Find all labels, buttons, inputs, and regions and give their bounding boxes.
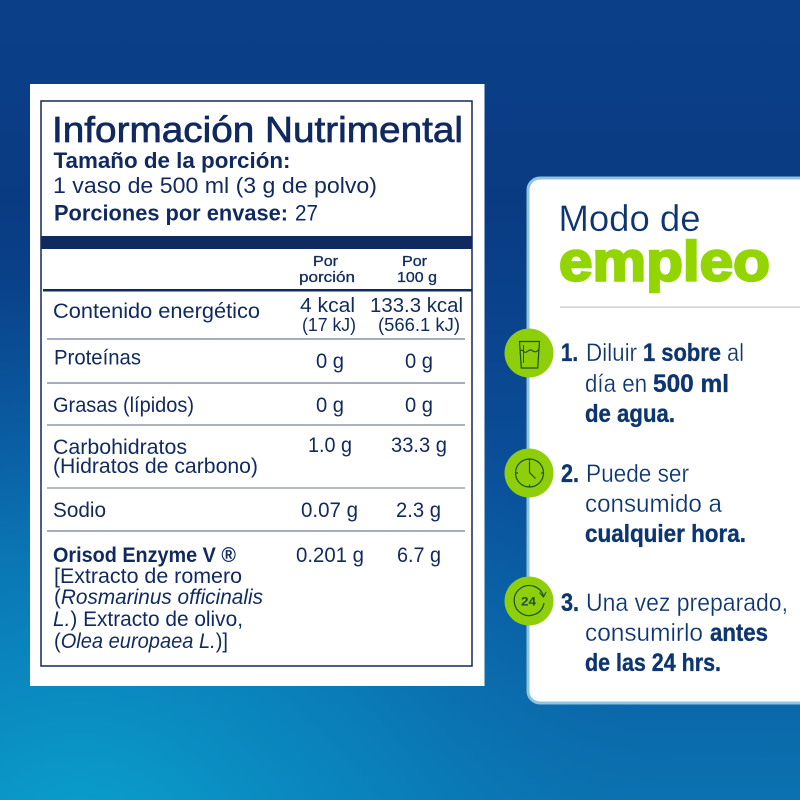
table column headers: Por (402, 253, 427, 270)
row: energy (53, 294, 463, 335)
row: energy: (566.1 kJ) (378, 314, 460, 335)
table column headers: Por (313, 253, 338, 270)
table column headers: porción (299, 269, 355, 286)
step 2 (561, 460, 746, 548)
row: energy: 4 kcal (300, 294, 355, 317)
heading: Modo de: Modo de (558, 198, 700, 239)
row: Orisod Enzyme: L.) Extracto de olivo, (53, 608, 243, 631)
row: fat: Grasas (lípidos) (53, 394, 194, 417)
serving size (53, 148, 377, 198)
row: carbohydrates: 1.0 g (308, 434, 352, 457)
step 3 (561, 589, 788, 677)
servings per container: 27 (295, 200, 318, 226)
heading: empleo: empleo (559, 230, 770, 292)
row: protein: 0 g (405, 350, 433, 373)
row: protein (54, 346, 433, 373)
row: sodium: 2.3 g (396, 499, 441, 522)
icon: water glass (504, 328, 554, 378)
step 1: 1. (561, 339, 578, 367)
step 1: 500 ml (653, 370, 729, 398)
row: protein: Proteínas (54, 346, 141, 370)
step 3: de las 24 hrs. (585, 649, 721, 677)
panel: directions for use (504, 178, 800, 703)
serving size: 1 vaso de 500 ml (3 g de polvo) (53, 173, 377, 198)
step 1: al (727, 339, 744, 367)
step 3: Una vez preparado, (586, 589, 788, 617)
step 1: Diluir (586, 339, 637, 367)
header band (41, 236, 472, 249)
icon: 24 hours (504, 576, 554, 626)
step 3: 3. (561, 589, 579, 617)
row: fat (53, 394, 433, 417)
row: Orisod Enzyme: (Rosmarinus officinalis (54, 586, 263, 609)
step 2: 2. (561, 460, 579, 488)
row: energy: 133.3 kcal (370, 294, 463, 317)
table rules (43, 289, 472, 532)
row: carbohydrates: (Hidratos de carbono) (53, 455, 258, 478)
row: protein: 0 g (316, 350, 344, 373)
row: sodium: 0.07 g (301, 499, 358, 522)
step 3: consumirlo (585, 619, 703, 647)
step 2: Puede ser (586, 460, 689, 488)
row: fat: 0 g (405, 394, 433, 417)
row: sodium (53, 499, 441, 522)
row: carbohydrates (53, 434, 447, 478)
divider (560, 306, 800, 308)
row: Orisod Enzyme: 6.7 g (397, 544, 441, 567)
step 2: cualquier hora. (585, 520, 746, 548)
icon: 24 hours: 24 (521, 594, 536, 608)
row: carbohydrates: 33.3 g (391, 434, 447, 457)
step 1: de agua. (585, 400, 675, 428)
serving size: Tamaño de la porción: (54, 148, 290, 173)
step 2: consumido a (585, 490, 722, 518)
step 1: día en (585, 370, 647, 398)
step 3: antes (710, 619, 768, 647)
step 1: 1 sobre (643, 339, 721, 367)
row: Orisod Enzyme: 0.201 g (296, 544, 364, 567)
panel: nutrition facts (30, 84, 484, 686)
row: energy: Contenido energético (53, 300, 260, 323)
row: carbohydrates: Carbohidratos (53, 436, 187, 459)
row: energy: (17 kJ) (302, 314, 356, 335)
table column headers: 100 g (397, 269, 437, 286)
row: Orisod Enzyme (53, 544, 441, 653)
icon: clock (504, 448, 554, 498)
row: fat: 0 g (316, 394, 344, 417)
step 1 (561, 339, 744, 428)
row: Orisod Enzyme: [Extracto de romero (54, 565, 242, 588)
row: sodium: Sodio (53, 499, 106, 522)
table column headers (299, 253, 437, 286)
servings per container: Porciones por envase: (54, 200, 288, 226)
title: Información Nutrimental (52, 109, 463, 150)
row: Orisod Enzyme: Orisod Enzyme V ® (53, 544, 236, 567)
row: Orisod Enzyme: (Olea europaea L.)] (54, 630, 228, 653)
